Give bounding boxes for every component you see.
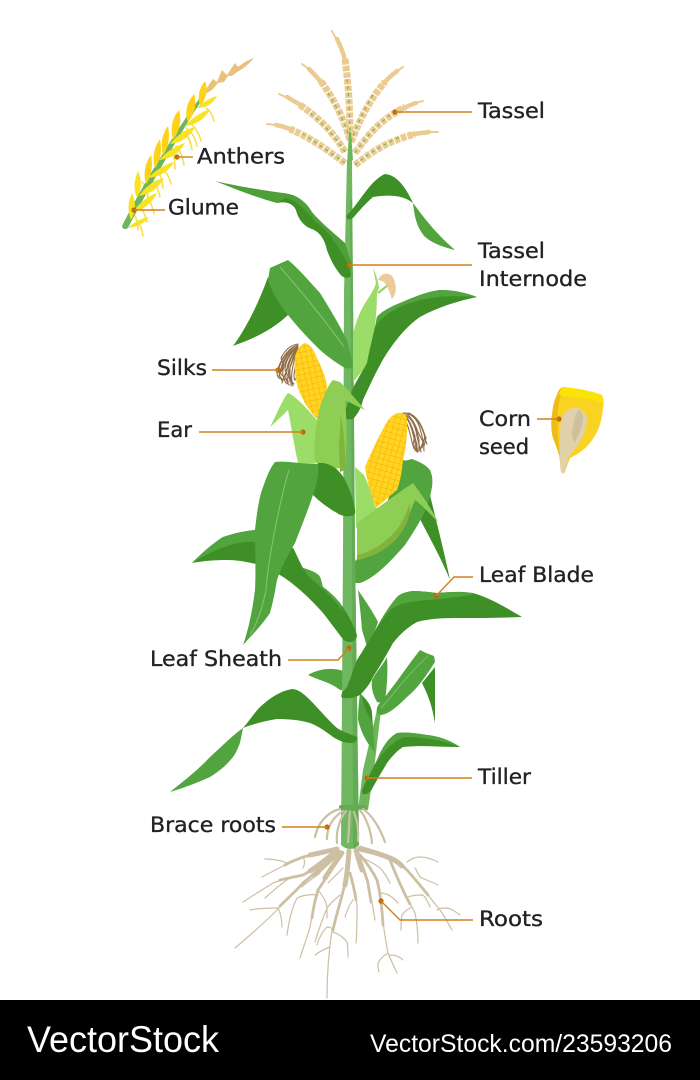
label: Leaf Sheath: Leaf Sheath [150, 647, 282, 672]
label: Tassel [392, 99, 545, 124]
label: Brace roots: Brace roots [150, 813, 276, 838]
leaf: top left [215, 181, 351, 278]
footer brand: VectorStock [27, 1019, 219, 1060]
tiller leaf: lower [362, 733, 460, 794]
small leaf behind stem [308, 669, 345, 690]
corn seed [551, 387, 604, 474]
tiller leaf: upper [422, 667, 435, 723]
label: Ear: Ear [157, 418, 192, 443]
label: Corn seed [479, 407, 562, 460]
label: Roots: Roots [479, 907, 543, 932]
label: Tiller [364, 765, 531, 790]
stem collar [339, 805, 367, 810]
fine root tips [235, 847, 460, 998]
label: Silks: Silks [157, 356, 207, 381]
label: Tassel: Tassel [477, 99, 545, 124]
narrow upright leaf [358, 590, 378, 650]
silks [277, 344, 298, 386]
glumes [145, 81, 207, 184]
thick root bases [310, 849, 402, 885]
label: Leaf Blade: Leaf Blade [479, 563, 594, 588]
tassel branch veins [303, 78, 400, 165]
tassel branch tips [267, 31, 438, 134]
tassel [267, 31, 438, 165]
flowering spikelet detail [122, 58, 254, 236]
main stem [339, 160, 367, 849]
label: Anthers: Anthers [197, 144, 285, 170]
footer image id: VectorStock.com/23593206 [370, 1030, 672, 1058]
centre husk [314, 380, 365, 470]
leaf: top right [347, 174, 455, 250]
leaf: lower right blade [341, 591, 522, 698]
tassel central peduncle [347, 132, 353, 165]
label: Brace roots [150, 813, 330, 838]
roots [235, 847, 460, 998]
label: Leaf Sheath [150, 645, 352, 672]
label: Tassel Internode: Internode [479, 267, 587, 292]
label: Corn seed: Corn [479, 407, 531, 432]
label: Ear [157, 418, 306, 443]
tassel spikelets [290, 58, 415, 165]
silks [403, 413, 427, 452]
endosperm [560, 407, 587, 474]
leaf behind second ear [343, 459, 450, 583]
first ear [270, 343, 365, 472]
left husk [355, 467, 380, 528]
husk [353, 268, 379, 382]
label: Roots [378, 898, 543, 932]
label: Glume [131, 196, 239, 220]
spikelet stem [122, 88, 209, 229]
husk shadow [357, 503, 410, 560]
tiller leaf: inner [358, 693, 375, 752]
upper small husk with silk [353, 268, 396, 382]
cob [365, 413, 407, 508]
label: Tassel Internode: Tassel [477, 239, 545, 264]
pollen tip [206, 58, 254, 93]
kernel [551, 387, 604, 472]
tiller stalk [358, 710, 381, 810]
tan silk [378, 274, 396, 299]
leaf: lower left [170, 689, 357, 792]
tiller leaf: centre [372, 657, 387, 703]
second ear [355, 413, 438, 560]
cob [295, 343, 327, 421]
leaf: mid left [243, 462, 355, 645]
label: Glume: Glume [168, 196, 239, 220]
label: Tiller: Tiller [477, 765, 531, 790]
anthers [132, 108, 214, 236]
germ [572, 410, 583, 442]
leaf: lower left back [192, 530, 357, 642]
tiller [358, 650, 460, 810]
left husk [270, 393, 320, 463]
label: Tassel Internode [346, 239, 587, 292]
front husk [357, 483, 438, 559]
label: Corn seed: seed [479, 435, 529, 460]
label: Leaf Blade [433, 563, 594, 599]
footer bar [0, 1000, 700, 1080]
leaf: upper left [233, 260, 353, 369]
brace roots [315, 809, 385, 843]
leaf: upper right [344, 290, 477, 419]
label: Silks [157, 356, 281, 381]
mid root thickness [280, 847, 428, 930]
